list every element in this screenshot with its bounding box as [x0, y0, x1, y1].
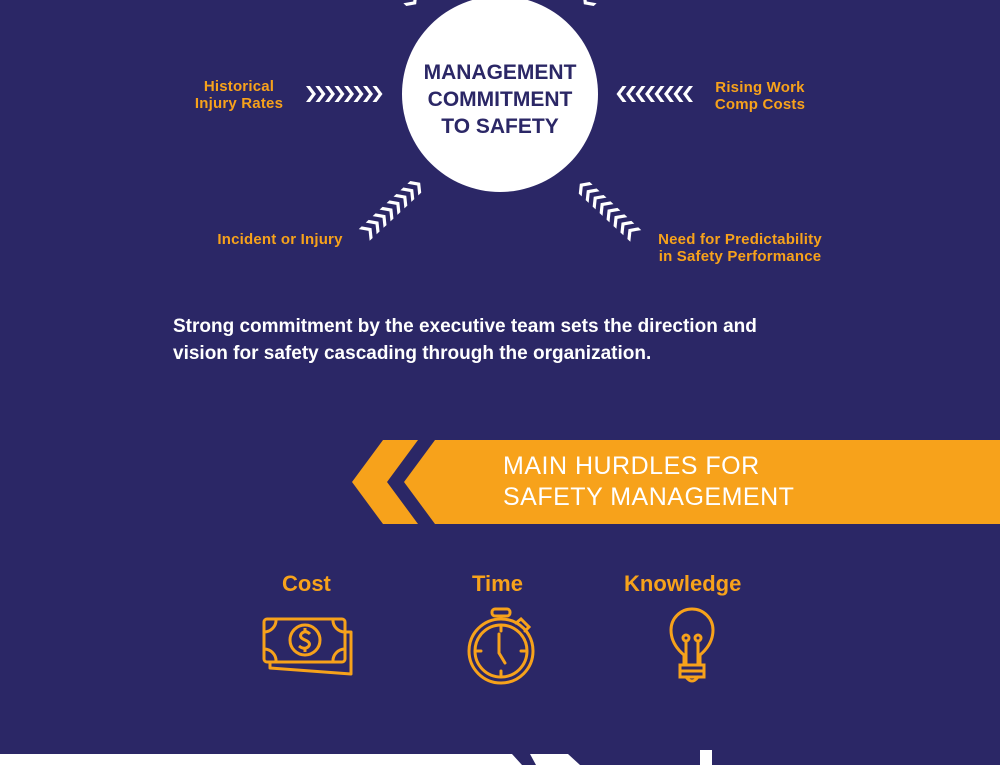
- banner heading: SAFETY MANAGEMENT: [503, 483, 794, 511]
- label: historical injury rates: [195, 78, 283, 112]
- circle title: [424, 61, 576, 138]
- icon: lightbulb: [671, 609, 713, 681]
- heading: cost: Cost: [282, 571, 331, 596]
- arrow: lower right: [574, 178, 641, 242]
- bottom white band: [0, 750, 712, 765]
- icon: stopwatch: [469, 609, 533, 683]
- label: need for predictability: Need for Predictability: [658, 231, 822, 248]
- arrow: top left: [355, 0, 422, 10]
- heading: knowledge: Knowledge: [624, 571, 741, 596]
- banner heading: [503, 452, 794, 511]
- label: rising work comp costs: [715, 79, 805, 113]
- circle title: MANAGEMENT: [424, 61, 576, 84]
- heading: time: Time: [472, 571, 523, 596]
- circle title: COMMITMENT: [428, 88, 572, 111]
- circle title: TO SAFETY: [441, 115, 559, 138]
- label: rising work comp costs: Comp Costs: [715, 96, 805, 113]
- label: incident or injury: Incident or Injury: [217, 231, 343, 248]
- icon: money: [264, 619, 351, 674]
- arrow: lower left: [359, 177, 426, 241]
- arrow: top right: [578, 0, 645, 10]
- banner chevrons: [352, 440, 1000, 524]
- label: rising work comp costs: Rising Work: [715, 79, 805, 96]
- text: commitment statement: Strong commitment by the executive team sets the direction and vision for safety cascading through the organization.: [173, 316, 757, 364]
- label: need for predictability: [658, 231, 822, 265]
- label: historical injury rates: Injury Rates: [195, 95, 283, 112]
- arrow: left: [306, 86, 382, 102]
- label: need for predictability: in Safety Performance: [659, 248, 821, 265]
- label: historical injury rates: Historical: [204, 78, 274, 95]
- center circle: [402, 0, 598, 192]
- banner heading: MAIN HURDLES FOR: [503, 452, 760, 480]
- arrow: right: [616, 86, 693, 102]
